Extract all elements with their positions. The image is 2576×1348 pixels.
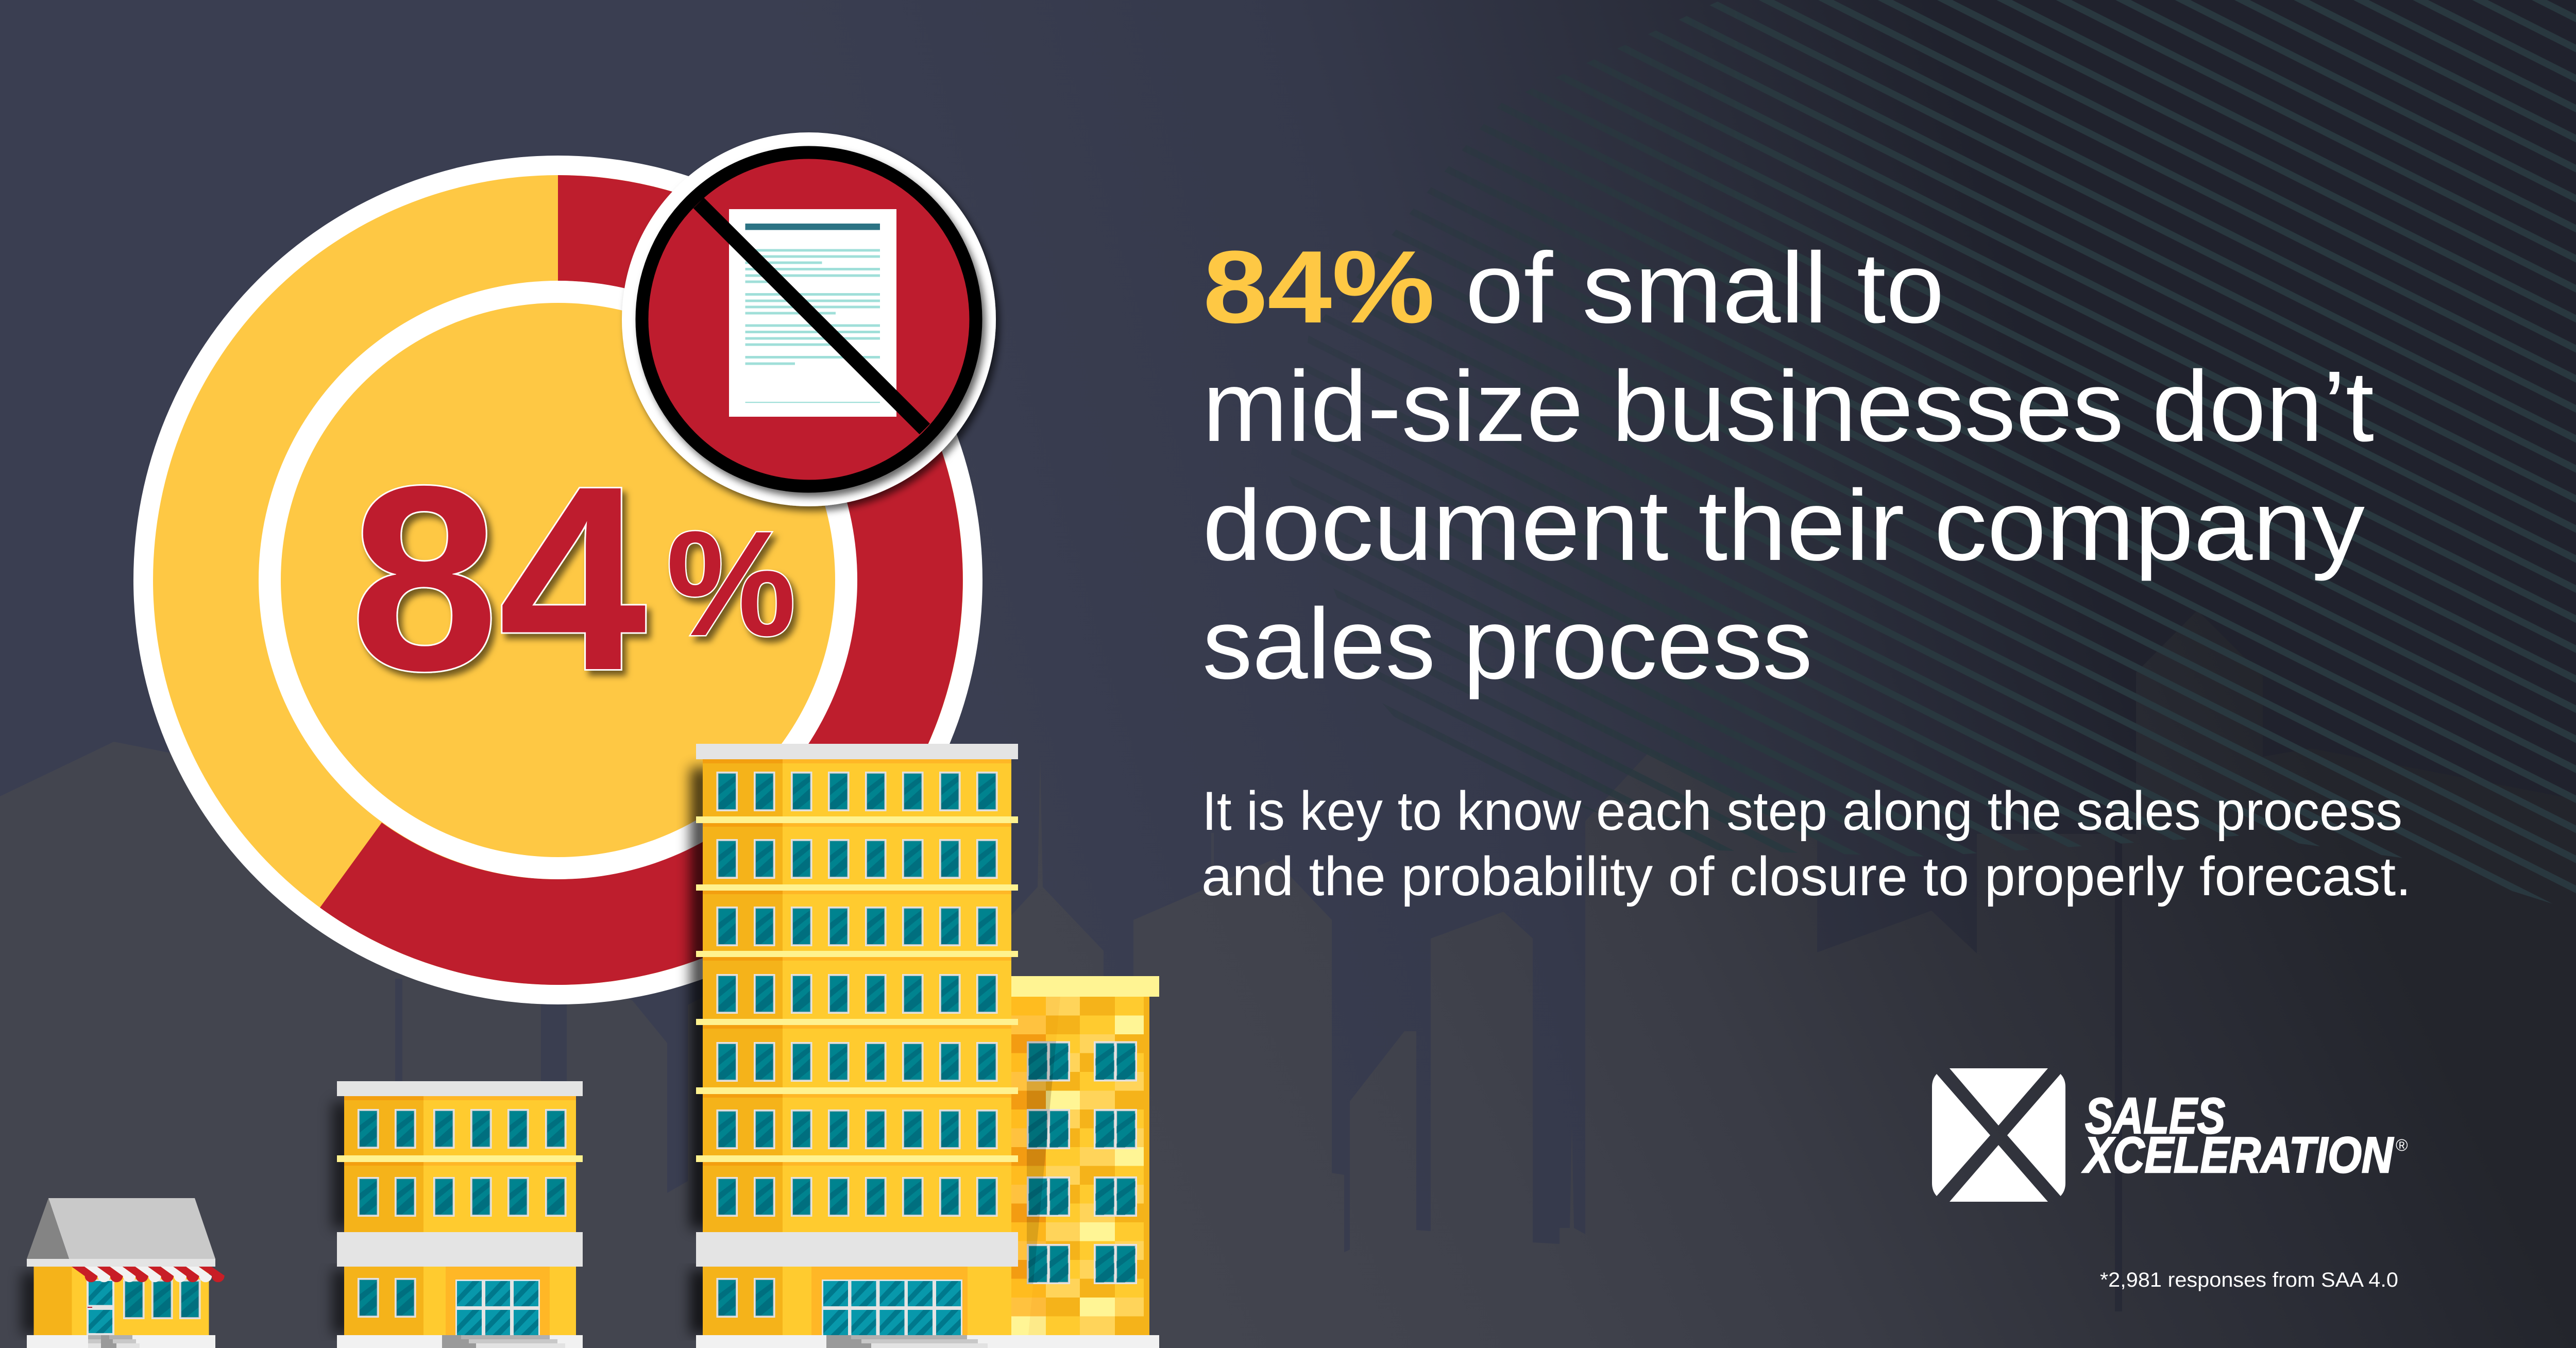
tall building walls: [703, 759, 1011, 1335]
big 84 percent figure: [350, 432, 796, 725]
building shadows: [22, 767, 711, 1334]
mid building cornice, ledge and band: [337, 1081, 583, 1267]
badge red disc with black ring: [642, 152, 976, 486]
shop roof: [27, 1198, 215, 1259]
headline: 84%: [1203, 230, 1435, 345]
brick wall: [1011, 997, 1149, 1335]
red ring segment 60 percent sweep: [320, 175, 963, 985]
supporting text: and the probability of closure to properly forecast.: [1201, 845, 2411, 907]
small shop building: [27, 1198, 225, 1348]
document page: [729, 209, 896, 417]
headline: document their company: [1202, 469, 2365, 582]
side building windows: [1027, 1041, 1137, 1284]
donut chart: [133, 156, 982, 1004]
footnote: *2,981 responses from SAA 4.0: [2100, 1269, 2398, 1291]
big 84 percent figure: %: [666, 500, 796, 667]
logo wordmark: SALES: [2085, 1087, 2225, 1144]
mid building base and steps: [337, 1335, 583, 1348]
shop fascia: [27, 1259, 215, 1267]
yellow ring segment: [153, 175, 963, 985]
shop walls: [34, 1267, 209, 1335]
side building cap: [1011, 976, 1159, 997]
tall building cornice, ledges and band: [696, 744, 1018, 1267]
headline: sales process: [1202, 588, 1812, 700]
mid building entrance: [455, 1279, 540, 1335]
tall building entrance: [822, 1279, 962, 1335]
mid building walls: [344, 1096, 576, 1335]
logo wordmark: ®: [2396, 1136, 2408, 1154]
supporting text: It is key to know each step along the sales process: [1202, 780, 2402, 842]
shop base and steps: [27, 1335, 215, 1348]
logo wordmark: [2082, 1087, 2408, 1183]
inner yellow disc: [281, 303, 835, 857]
shop windows: [123, 1279, 201, 1319]
prohibition slash: [699, 203, 925, 429]
big 84 percent figure: 84: [350, 432, 648, 725]
side brick building: [1011, 976, 1159, 1335]
supporting text: [1201, 780, 2411, 907]
city skyline silhouette: [0, 610, 2576, 1348]
shop awning: [72, 1267, 225, 1282]
logo X mark: [1932, 1068, 2065, 1202]
inner white ring: [259, 281, 857, 879]
diagonal stripe pattern: [1477, 0, 2576, 903]
mid-size building: [337, 1081, 583, 1348]
headline: of small to: [1465, 232, 1944, 344]
mid building windows: [358, 1109, 567, 1318]
tall building base and steps: [696, 1335, 1159, 1348]
shop door: [87, 1279, 114, 1335]
logo: Sales Xceleration: [1932, 1068, 2408, 1202]
tall building windows: [716, 772, 997, 1318]
icon: no document badge: [622, 132, 996, 506]
headline: mid-size businesses don’t: [1202, 350, 2374, 463]
tall building: [696, 744, 1159, 1348]
headline: [1202, 230, 2374, 700]
logo wordmark: XCELERATION: [2082, 1127, 2394, 1183]
